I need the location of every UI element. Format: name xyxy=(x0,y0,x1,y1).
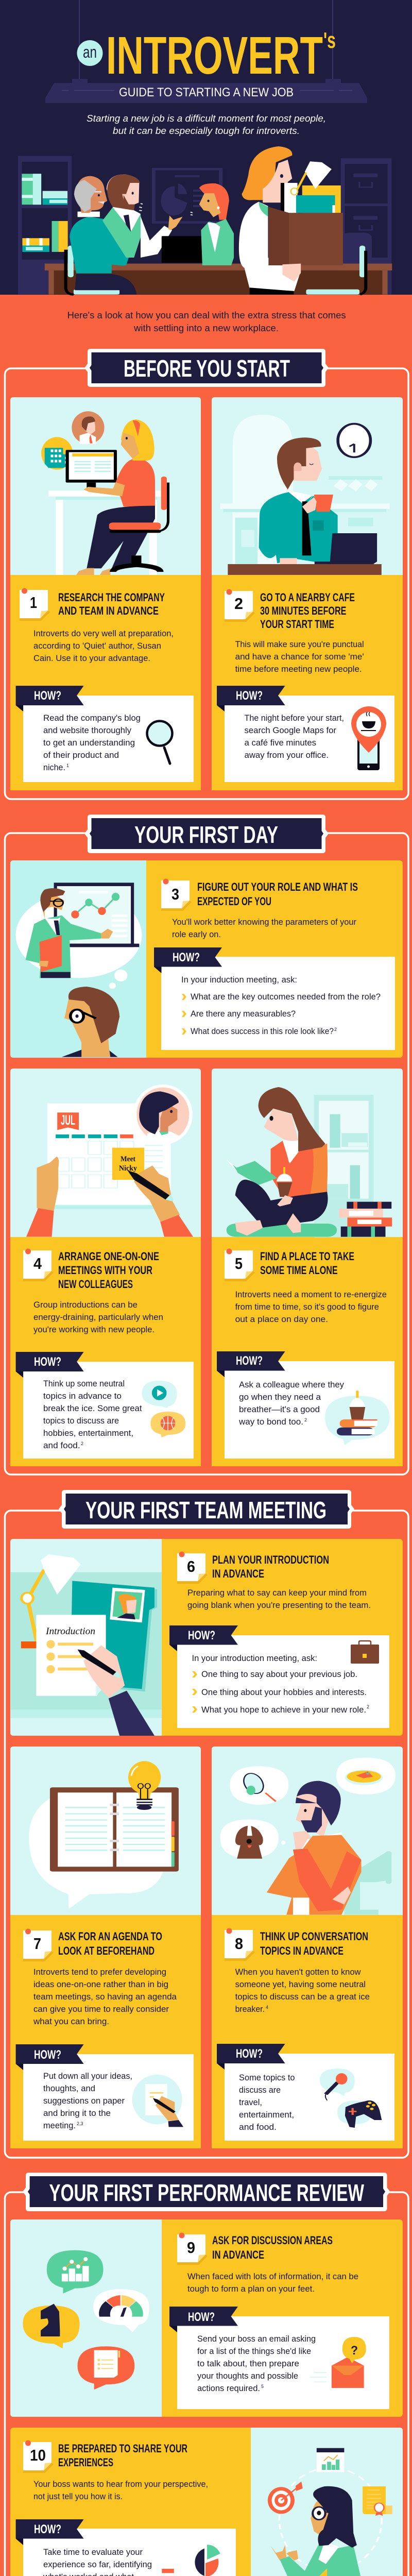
how box 2: away from your office. xyxy=(244,751,329,760)
subtitle: GUIDE TO STARTING A NEW JOB xyxy=(119,86,294,99)
text 7: can give you time to really consider xyxy=(33,2005,169,2014)
text 1: according to 'Quiet' author, Susan xyxy=(33,641,161,651)
text 8: When you haven't gotten to know xyxy=(235,1968,361,1977)
text 6: Preparing what to say can keep your mind from xyxy=(187,1588,367,1598)
heading 7: LOOK AT BEFOREHAND xyxy=(58,1944,154,1957)
card 6: plan your introduction xyxy=(10,1539,403,1736)
card 8: think up conversation topics xyxy=(212,1747,403,2148)
heading 1: RESEARCH THE COMPANY xyxy=(58,591,165,604)
heading 7: ASK FOR AN AGENDA TO xyxy=(58,1930,162,1943)
heading: your first team meeting xyxy=(59,1490,354,1529)
heading 4 xyxy=(58,1250,159,1291)
illustration: calendar and note: Meet xyxy=(121,1155,135,1163)
heading 10 xyxy=(58,2442,187,2469)
laptop xyxy=(162,236,203,263)
how box 6: One thing to say about your previous job. xyxy=(201,1670,357,1679)
how box 1: of their product and xyxy=(43,751,119,760)
how box 1 xyxy=(16,686,194,782)
step 1 xyxy=(20,588,50,621)
heading 6 xyxy=(212,1553,329,1580)
heading 8: THINK UP CONVERSATION xyxy=(260,1930,368,1943)
how box 7: meeting. xyxy=(43,2121,76,2130)
how box 10: Take time to evaluate your xyxy=(43,2548,143,2557)
how box 9 xyxy=(169,2307,389,2409)
text 4: energy-draining, particularly when xyxy=(33,1313,163,1322)
text 2 xyxy=(235,640,364,674)
panel: your first team meeting xyxy=(5,1490,408,2158)
woman with box xyxy=(242,146,292,200)
how box 1: and website thoroughly xyxy=(43,726,132,735)
intro text: but it can be especially tough for introverts. xyxy=(113,126,300,136)
heading: your first day xyxy=(84,815,329,853)
heading 1 xyxy=(58,591,165,617)
lead-in text xyxy=(67,310,346,333)
illustration: woman with goals xyxy=(268,2448,392,2576)
how box 5: 2 xyxy=(304,1417,307,1422)
step 6 xyxy=(177,1552,208,1584)
how box 8 xyxy=(217,2044,394,2141)
lead-in text: Here's a look at how you can deal with the extra stress that comes xyxy=(67,310,346,320)
heading 8 xyxy=(260,1930,368,1957)
how box 1: to get an understanding xyxy=(43,738,135,748)
heading 6: PLAN YOUR INTRODUCTION xyxy=(212,1553,329,1566)
heading 3 xyxy=(197,880,358,908)
text 9 xyxy=(187,2272,358,2294)
how box 4: topics in advance to xyxy=(43,1392,122,1401)
icon: coffee on books xyxy=(325,1391,390,1445)
how box 4: 2 xyxy=(81,1441,83,1446)
how box 2 xyxy=(217,686,394,782)
box xyxy=(302,185,341,213)
how box 7: and bring it to the xyxy=(43,2109,111,2118)
heading 9 xyxy=(212,2234,333,2261)
man in teal xyxy=(70,217,129,274)
card 9: ask for discussion areas xyxy=(10,2219,403,2417)
icon: briefcase xyxy=(351,1641,379,1664)
illustration: woman reading xyxy=(226,1087,392,1238)
how box 9: 5 xyxy=(261,2384,264,2389)
text 9: tough to form a plan on your feet. xyxy=(187,2284,315,2294)
how box 1: HOW? xyxy=(34,689,61,703)
heading: your first team meeting: YOUR FIRST TEAM MEETING xyxy=(85,1497,327,1523)
heading 1: AND TEAM IN ADVANCE xyxy=(58,604,159,617)
text 8: 4 xyxy=(266,2005,268,2010)
icon: envelope with question xyxy=(310,2337,366,2388)
text 2: This will make sure you're punctual xyxy=(235,640,364,649)
how box 8: discuss are xyxy=(239,2086,281,2095)
text 4: you're working with new people. xyxy=(33,1325,154,1334)
step 3 xyxy=(161,879,192,911)
illustration: calendar and note: JUL xyxy=(61,1112,75,1128)
man in green xyxy=(107,174,139,210)
text 4: Group introductions can be xyxy=(33,1300,138,1310)
illustration: icon bubbles xyxy=(23,2250,149,2389)
how box 9: to talk about, then prepare xyxy=(197,2359,299,2368)
how box 8: entertainment, xyxy=(239,2110,294,2120)
heading 9: ASK FOR DISCUSSION AREAS xyxy=(212,2234,333,2247)
heading 10: BE PREPARED TO SHARE YOUR xyxy=(58,2442,187,2455)
how box 3: HOW? xyxy=(173,951,200,964)
text 10: Your boss wants to hear from your perspective, xyxy=(33,2480,208,2489)
heading: before you start: BEFORE YOU START xyxy=(124,355,290,382)
how box 6 xyxy=(169,1625,389,1728)
how box 6: What you hope to achieve in your new role. xyxy=(201,1705,366,1715)
how box 3: 2 xyxy=(334,1027,337,1032)
how box 7: HOW? xyxy=(34,2048,61,2062)
how box 8: Some topics to xyxy=(239,2073,295,2082)
icon: envelope with question: ? xyxy=(351,2344,358,2358)
text 3 xyxy=(172,918,356,939)
how box 7: 2,3 xyxy=(77,2121,83,2126)
chair right xyxy=(359,246,365,277)
title: Introvert's: INTROVERT xyxy=(106,26,323,85)
step 7: 7 xyxy=(33,1935,41,1953)
icon: map pin on phone xyxy=(351,706,386,770)
illustration: man with coffee xyxy=(220,415,390,575)
how box 9: for a list of the things she'd like xyxy=(197,2347,311,2356)
intro text xyxy=(87,113,326,136)
how box 8: and food. xyxy=(239,2123,277,2132)
text 3: You'll work better knowing the parameters of your xyxy=(172,918,356,927)
text 5: out a place on day one. xyxy=(235,1315,328,1324)
how box 7 xyxy=(16,2044,194,2141)
icon: hand writing xyxy=(132,2075,183,2127)
step 6: 6 xyxy=(187,1557,195,1575)
step 7 xyxy=(23,1929,54,1961)
icon: magnifying glass xyxy=(147,721,172,764)
heading 2: YOUR START TIME xyxy=(260,618,334,631)
how box 2: a café five minutes xyxy=(244,738,316,748)
how box 6: One thing about your hobbies and interests. xyxy=(201,1688,367,1697)
heading 4: ARRANGE ONE-ON-ONE xyxy=(58,1250,159,1263)
heading 3: FIGURE OUT YOUR ROLE AND WHAT IS xyxy=(197,880,358,893)
heading: before you start xyxy=(84,349,329,387)
text 5: from time to time, so it's good to figure xyxy=(235,1302,379,1312)
how box 7: suggestions on paper xyxy=(43,2096,125,2106)
step 10 xyxy=(23,2440,54,2473)
how box 4: hobbies, entertainment, xyxy=(43,1429,133,1438)
panel: before you start xyxy=(5,349,408,799)
card 7: ask for an agenda xyxy=(10,1747,201,2148)
icons: microphone and game controller xyxy=(320,2069,382,2128)
intro text: Starting a new job is a difficult moment for most people, xyxy=(87,113,326,124)
how box 5: HOW? xyxy=(236,1354,263,1368)
how box 5: go when they need a xyxy=(239,1393,321,1402)
heading 4: MEETINGS WITH YOUR xyxy=(58,1264,152,1277)
step 5 xyxy=(225,1249,255,1281)
step 2: 2 xyxy=(234,595,243,613)
illustration: calendar and note xyxy=(26,1084,193,1237)
text 2: time before meeting new people. xyxy=(235,665,362,674)
desk xyxy=(45,264,392,270)
text 3: role early on. xyxy=(172,930,221,939)
illustration: man imagining presentation xyxy=(16,883,142,1057)
card 3: figure out your role xyxy=(10,860,403,1058)
step 10: 10 xyxy=(30,2446,46,2464)
how box 3 xyxy=(154,947,395,1050)
illustration: woman at computer xyxy=(41,411,168,575)
heading 2: GO TO A NEARBY CAFE xyxy=(260,591,355,604)
lead-in text: with settling into a new workplace. xyxy=(133,323,279,333)
text 8: breaker. xyxy=(235,2005,265,2014)
how box 4: break the ice. Some great xyxy=(43,1404,142,1413)
step 8 xyxy=(225,1928,255,1961)
heading 10: EXPERIENCES xyxy=(58,2456,113,2469)
text 2: and have a chance for some 'me' xyxy=(235,652,364,662)
step 5: 5 xyxy=(235,1255,243,1273)
woman with red hair xyxy=(199,183,229,220)
how box 10 xyxy=(16,2519,236,2576)
how box 6: 2 xyxy=(367,1704,369,1709)
text 7: team meetings, so having an agenda xyxy=(33,1992,177,2002)
step 1: 1 xyxy=(30,594,37,612)
how box 3: In your induction meeting, ask: xyxy=(181,975,297,985)
text 5 xyxy=(235,1290,387,1324)
heading: your first performance review xyxy=(23,2173,390,2211)
heading 5: SOME TIME ALONE xyxy=(260,1264,338,1277)
panel: your first performance review xyxy=(5,2173,408,2576)
how box 1: niche. xyxy=(43,763,65,772)
how box 8: travel, xyxy=(239,2098,262,2107)
text 6 xyxy=(187,1588,371,1610)
heading 9: IN ADVANCE xyxy=(212,2248,264,2261)
how box 4 xyxy=(16,1352,194,1459)
text 7 xyxy=(33,1968,177,2026)
heading 7 xyxy=(58,1930,162,1957)
how box 4: and food. xyxy=(43,1441,80,1450)
how box 3: What are the key outcomes needed from the role? xyxy=(191,992,381,1002)
illustration: introduction paper: Introduction xyxy=(45,1626,95,1637)
how box 5: breather—it's a good xyxy=(239,1405,320,1414)
how box 5: way to bond too. xyxy=(238,1417,303,1427)
how box 3: What does success in this role look like? xyxy=(191,1027,334,1036)
heading 8: TOPICS IN ADVANCE xyxy=(260,1944,344,1957)
heading 3: EXPECTED OF YOU xyxy=(197,895,271,908)
heading 4: NEW COLLEAGUES xyxy=(58,1278,133,1291)
text 6: going blank when you're presenting to the team. xyxy=(187,1601,371,1610)
step 2 xyxy=(225,589,255,622)
how box 9: your thoughts and possible xyxy=(197,2371,298,2381)
text 8 xyxy=(235,1968,370,2014)
how box 7: thoughts, and xyxy=(43,2084,95,2093)
how box 1: 1 xyxy=(66,763,69,768)
title badge: an: an xyxy=(83,43,97,61)
text 4 xyxy=(33,1300,163,1334)
card 10: be prepared to share xyxy=(10,2428,403,2576)
how box 5 xyxy=(217,1351,394,1459)
illustration: planner and bulb xyxy=(29,1761,179,1909)
step 9: 9 xyxy=(187,2239,195,2257)
text 10 xyxy=(33,2480,208,2501)
heading 5 xyxy=(260,1250,354,1277)
panel: your first day xyxy=(5,815,408,1475)
heading: your first day: YOUR FIRST DAY xyxy=(134,821,278,848)
text 1: Cain. Use it to your advantage. xyxy=(33,654,150,663)
step 4 xyxy=(23,1249,54,1281)
text 1: Introverts do very well at preparation, xyxy=(33,629,174,638)
step 8: 8 xyxy=(235,1935,243,1953)
title badge: an xyxy=(77,40,103,66)
step 3: 3 xyxy=(171,885,179,903)
text 8: someone yet, having some neutral xyxy=(235,1980,366,1989)
illustration: man thinking xyxy=(220,1758,396,1915)
how box 6: HOW? xyxy=(188,1629,215,1642)
card 4: arrange one-on-one meetings xyxy=(10,1069,201,1466)
text 7: Introverts tend to prefer developing xyxy=(33,1968,166,1977)
text 5: Introverts need a moment to re-energize xyxy=(235,1290,387,1299)
card 5: find a place alone xyxy=(212,1069,403,1466)
heading 6: IN ADVANCE xyxy=(212,1567,264,1580)
how box 9: actions required. xyxy=(197,2384,260,2393)
how box 3: Are there any measurables? xyxy=(191,1009,296,1019)
how box 4: Think up some neutral xyxy=(43,1379,125,1388)
card 1: research the company xyxy=(10,397,201,790)
how box 4: topics to discuss are xyxy=(43,1416,119,1426)
hero illustration: office scene xyxy=(18,146,392,295)
step 4: 4 xyxy=(33,1255,42,1273)
how box 10: experience so far, identifying xyxy=(43,2560,152,2569)
how box 5: Ask a colleague where they xyxy=(239,1380,345,1389)
heading 5: FIND A PLACE TO TAKE xyxy=(260,1250,354,1263)
card 2: go to a nearby cafe xyxy=(212,397,403,790)
icons: play and basketball bubbles xyxy=(142,1381,185,1437)
illustration: introduction paper xyxy=(10,1554,162,1736)
how box 2: HOW? xyxy=(236,689,263,703)
how box 10: HOW? xyxy=(34,2522,61,2536)
how box 1: Read the company's blog xyxy=(43,714,141,723)
header: title and lamp xyxy=(45,0,367,103)
text 9: When faced with lots of information, it can be xyxy=(187,2272,358,2281)
how box 6: In your introduction meeting, ask: xyxy=(192,1654,317,1663)
heading 2 xyxy=(260,591,355,631)
text 1 xyxy=(33,629,174,663)
how box 8: HOW? xyxy=(236,2047,263,2061)
step 9 xyxy=(177,2233,208,2265)
how box 4: HOW? xyxy=(34,1355,61,1369)
how box 2: The night before your start, xyxy=(244,714,344,723)
text 7: what you can bring. xyxy=(33,2017,109,2026)
how box 7: Put down all your ideas, xyxy=(43,2072,132,2081)
how box 9: HOW? xyxy=(188,2310,215,2324)
heading 2: 30 MINUTES BEFORE xyxy=(260,604,346,617)
text 7: ideas one-on-one rather than in big xyxy=(33,1980,168,1989)
illustration: calendar and note: Nicky xyxy=(119,1164,137,1173)
how box 2: search Google Maps for xyxy=(244,726,337,735)
text 10: not just tell you how it is. xyxy=(33,2492,123,2501)
chair left xyxy=(66,251,74,295)
icon: pie chart and bars xyxy=(162,2545,220,2576)
how box 9: Send your boss an email asking xyxy=(197,2334,316,2344)
text 8: topics to discuss can be a great ice xyxy=(235,1992,370,2002)
title: Introvert's: 's xyxy=(323,28,336,53)
